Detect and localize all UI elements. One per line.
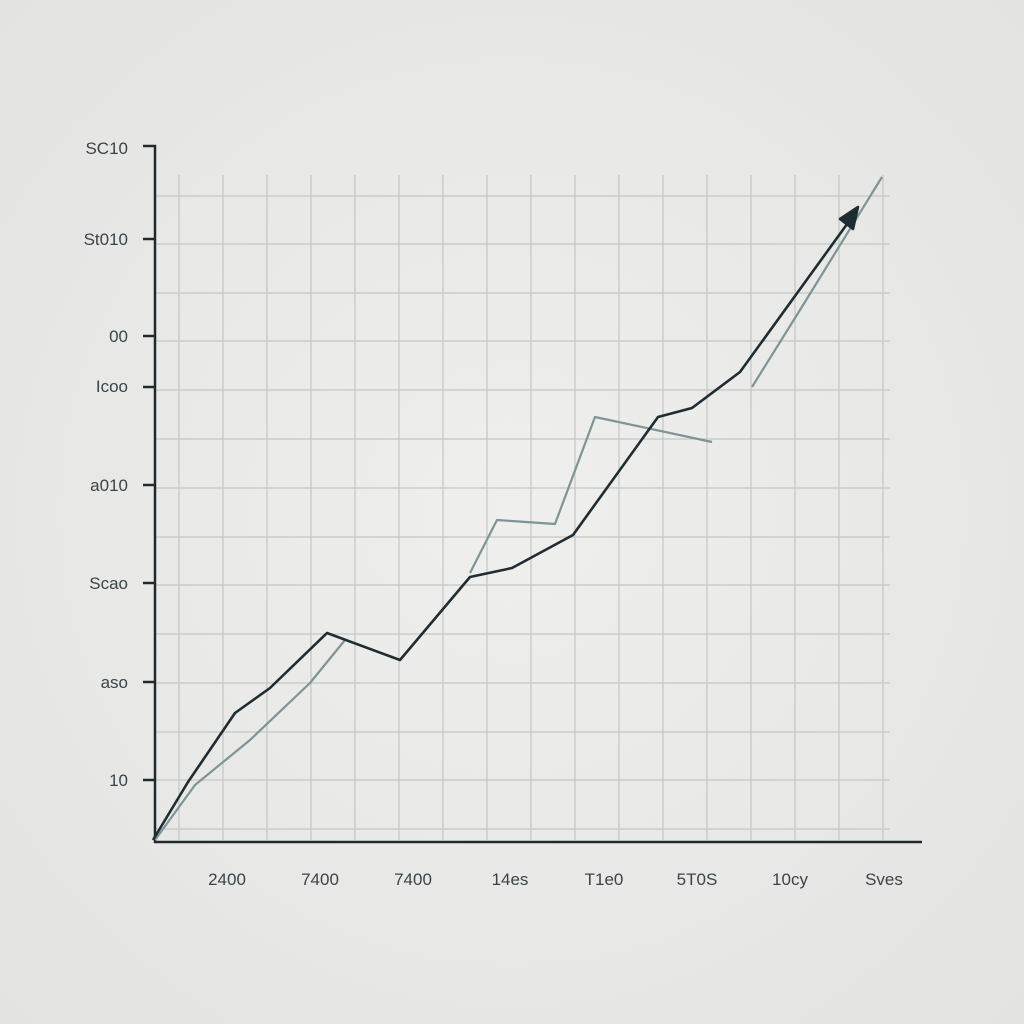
y-axis labels: Icoo xyxy=(96,377,128,396)
x-axis labels xyxy=(208,870,903,889)
x-axis labels: 5T0S xyxy=(677,870,717,889)
x-axis labels: T1e0 xyxy=(585,870,623,889)
axes xyxy=(143,146,922,842)
x-axis labels: 2400 xyxy=(208,870,246,889)
y-axis labels: Scao xyxy=(89,574,128,593)
y-axis labels: SC10 xyxy=(85,139,128,158)
x-axis labels: Sves xyxy=(865,870,903,889)
y-axis labels xyxy=(84,139,128,790)
y-axis labels: aso xyxy=(101,673,128,692)
y-axis labels: a010 xyxy=(90,476,128,495)
x-axis labels: 7400 xyxy=(301,870,339,889)
y-axis labels: 10 xyxy=(109,771,128,790)
x-axis labels: 14es xyxy=(492,870,528,889)
y-axis labels: 00 xyxy=(109,327,128,346)
dark trend line with arrow xyxy=(153,207,858,840)
light line xyxy=(155,177,882,840)
x-axis labels: 10cy xyxy=(772,870,808,889)
x-axis labels: 7400 xyxy=(394,870,432,889)
y-axis labels: St010 xyxy=(84,230,128,249)
